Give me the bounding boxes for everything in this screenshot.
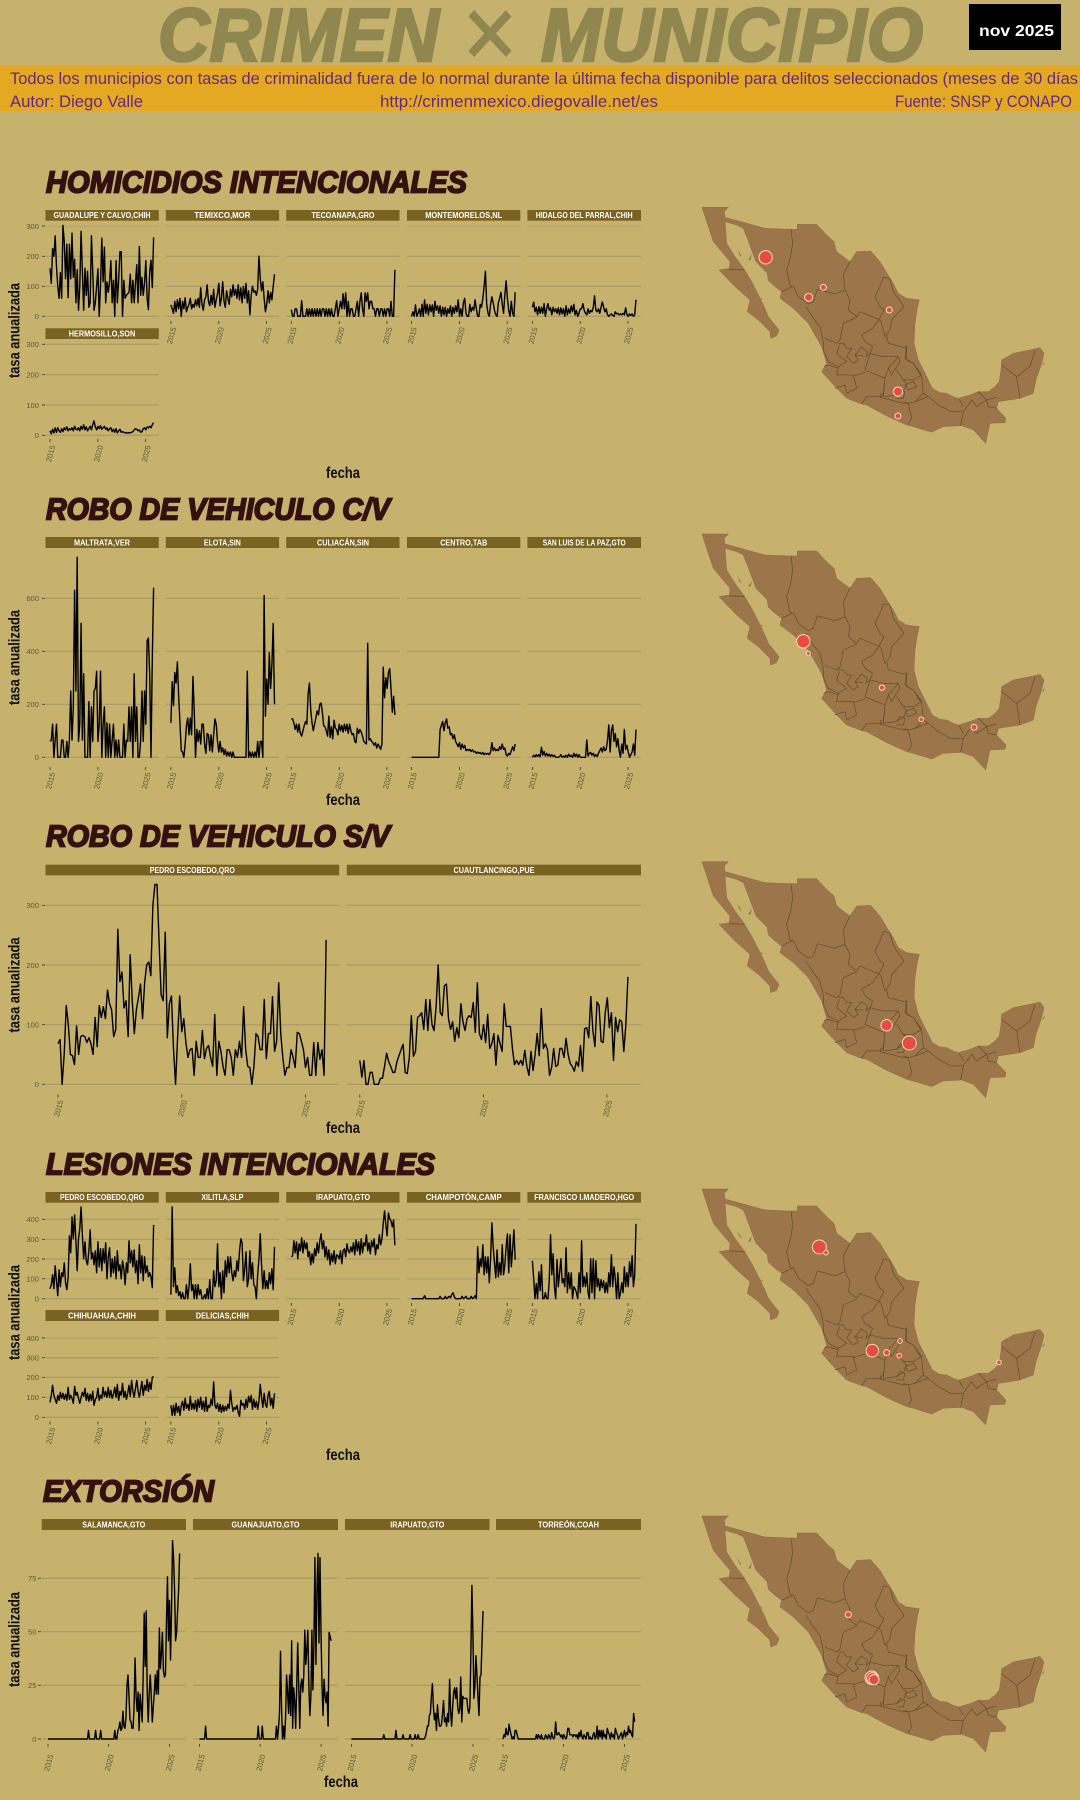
panel: Torreón: 2025 — [619, 1753, 632, 1772]
panel: Irapuato extorsión — [345, 1519, 490, 1772]
panel: Pedro Escobedo: 2025 — [300, 1099, 313, 1118]
panel: Temixco: TEMIXCO,MOR — [194, 211, 251, 220]
panel: Champotón: CHAMPOTÓN,CAMP — [426, 1193, 502, 1202]
panel: Champotón: 2020 — [454, 1308, 467, 1326]
panel: Pedro Escobedo lesiones: 100 — [26, 1274, 39, 1284]
panel: Irapuato extorsión: 2020 — [406, 1753, 419, 1772]
panel: Salamanca: 50 — [28, 1628, 36, 1636]
panel: Maltrata — [26, 537, 159, 790]
panel: Tecoanapa: 2025 — [381, 326, 394, 345]
panel: Pedro Escobedo: 100 — [26, 1020, 39, 1030]
panel: Hermosillo: 300 — [26, 340, 39, 349]
panel: Chihuahua: 2025 — [140, 1426, 153, 1445]
panel: Chihuahua: 300 — [26, 1354, 39, 1362]
date badge: nov 2025 — [979, 23, 1054, 40]
panel: Chihuahua: 400 — [26, 1334, 39, 1343]
y axis title: tasa anualizada — [6, 937, 24, 1032]
date badge — [969, 4, 1061, 50]
heading: lesiones: LESIONES INTENCIONALES — [46, 1148, 436, 1182]
panel: Delicias: 2025 — [261, 1426, 274, 1445]
panel: Delicias: 2020 — [213, 1426, 226, 1445]
panel: Hermosillo: 2015 — [44, 444, 57, 463]
panel: Maltrata: 600 — [26, 594, 39, 603]
panel: Hermosillo — [26, 328, 159, 463]
panel: Pedro Escobedo lesiones: 0 — [35, 1294, 39, 1304]
panel: Francisco I. Madero: 2025 — [622, 1308, 635, 1326]
panel: Chihuahua: 2020 — [92, 1426, 105, 1445]
panel: Hermosillo: 200 — [26, 370, 39, 380]
panel: Hermosillo: 100 — [26, 401, 39, 410]
panel: Pedro Escobedo: 2020 — [176, 1099, 189, 1118]
panel: Tecoanapa — [285, 210, 400, 345]
panel: Pedro Escobedo — [26, 865, 339, 1118]
panel: Delicias: DELICIAS,CHIH — [196, 1311, 249, 1320]
panel: Xilitla: XILITLA,SLP — [201, 1193, 244, 1202]
panel: Maltrata: 2015 — [44, 771, 57, 790]
heading: extorsión: EXTORSIÓN — [43, 1474, 215, 1508]
panel: Maltrata: 2025 — [140, 771, 153, 790]
x axis title: fecha — [326, 1447, 360, 1464]
panel: Montemorelos — [406, 210, 520, 345]
panel: Hermosillo: HERMOSILLO,SON — [69, 329, 135, 338]
y axis title: tasa anualizada — [6, 1592, 24, 1687]
panel: Salamanca: 25 — [28, 1681, 36, 1690]
heading: homicidios: HOMICIDIOS INTENCIONALES — [46, 166, 468, 200]
panel: Pedro Escobedo lesiones: 200 — [26, 1255, 39, 1264]
panel: Montemorelos: 2025 — [501, 326, 514, 345]
map: extorsión — [702, 1516, 1045, 1752]
heading: robo c/v: ROBO DE VEHICULO C/V — [46, 492, 392, 526]
panel: Salamanca: 75 — [28, 1574, 36, 1583]
panel: Chihuahua: 100 — [26, 1393, 39, 1402]
panel: Delicias — [165, 1310, 279, 1445]
panel: Pedro Escobedo: 300 — [26, 901, 39, 910]
panel: Pedro Escobedo: PEDRO ESCOBEDO,QRO — [150, 866, 235, 875]
x axis title: fecha — [326, 465, 360, 482]
panel: Elota — [165, 537, 279, 790]
panel: Irapuato lesiones — [285, 1192, 400, 1326]
panel: Temixco — [165, 210, 279, 345]
panel: Guanajuato: 2020 — [254, 1753, 267, 1772]
panel: Centro — [406, 537, 520, 790]
panel: Chihuahua — [26, 1310, 159, 1445]
subtitle banner — [0, 65, 1080, 111]
panel: Salamanca — [28, 1519, 186, 1772]
panel: Francisco I. Madero: FRANCISCO I.MADERO,HGO — [534, 1193, 634, 1202]
panel: Elota: 2020 — [213, 771, 226, 790]
panel: Hidalgo del Parral — [527, 210, 641, 345]
panel: Hidalgo del Parral: HIDALGO DEL PARRAL,CHIH — [536, 211, 633, 220]
panel: Cuautlancingo — [347, 865, 641, 1118]
panel: Elota: ELOTA,SIN — [204, 538, 241, 547]
panel: San Luis de la Paz: 2025 — [622, 771, 635, 790]
panel: Delicias: 2015 — [165, 1426, 178, 1445]
x axis title: fecha — [324, 1774, 358, 1791]
panel: Cuautlancingo: 2020 — [478, 1099, 491, 1118]
panel: Guanajuato: GUANAJUATO,GTO — [232, 1520, 300, 1529]
panel: Champotón: 2015 — [406, 1308, 419, 1326]
panel: Pedro Escobedo lesiones: 300 — [26, 1235, 39, 1244]
panel: Torreón: TORREÓN,COAH — [538, 1520, 599, 1529]
panel: Montemorelos: 2015 — [406, 326, 419, 345]
panel: Francisco I. Madero — [527, 1192, 641, 1326]
panel: Xilitla — [166, 1192, 279, 1299]
panel: Pedro Escobedo lesiones — [26, 1192, 159, 1304]
panel: Salamanca: 2020 — [103, 1753, 116, 1772]
panel: Chihuahua: 0 — [35, 1413, 39, 1422]
panel: Guanajuato: 2025 — [315, 1753, 328, 1772]
map: robo c/v — [702, 534, 1045, 770]
panel: Cuautlancingo: 2025 — [601, 1099, 614, 1118]
panel: Cuautlancingo: CUAUTLANCINGO,PUE — [454, 866, 535, 875]
panel: Irapuato lesiones: 2015 — [285, 1308, 299, 1326]
panel: Salamanca: 2015 — [42, 1753, 55, 1772]
panel: Culiacán — [285, 537, 400, 790]
panel: San Luis de la Paz: 2015 — [527, 771, 540, 790]
subtitle banner: Autor: Diego Valle — [10, 93, 143, 111]
panel: Pedro Escobedo lesiones: 400 — [26, 1215, 39, 1224]
panel: Maltrata: 2020 — [92, 771, 105, 790]
y axis title: tasa anualizada — [6, 610, 24, 705]
panel: Guadalupe y Calvo: 0 — [35, 312, 39, 321]
panel: Guadalupe y Calvo: 100 — [26, 282, 39, 291]
map: homicidios — [702, 207, 1045, 443]
map: robo s/v — [702, 862, 1045, 1098]
panel: Irapuato lesiones: 2025 — [381, 1308, 394, 1326]
panel: San Luis de la Paz: 2020 — [574, 771, 588, 790]
panel: Hidalgo del Parral: 2015 — [527, 326, 540, 345]
panel: Maltrata: 0 — [35, 753, 39, 762]
panel: Elota: 2025 — [261, 771, 274, 790]
panel: Maltrata: 400 — [26, 647, 39, 656]
panel: Pedro Escobedo: 200 — [26, 961, 39, 970]
panel: Tecoanapa: 2020 — [333, 326, 346, 345]
panel: Maltrata: 200 — [26, 700, 39, 709]
heading: robo s/v: ROBO DE VEHICULO S/V — [46, 820, 392, 854]
panel: Salamanca: 2025 — [164, 1753, 177, 1772]
panel: Montemorelos: 2020 — [454, 326, 467, 345]
map: lesiones — [702, 1189, 1045, 1425]
subtitle banner: Todos los municipios con tasas de criminalidad fuera de lo normal durante la última fecha disponible para delitos seleccionados (meses de 30 días — [10, 70, 1078, 88]
panel: Temixco: 2015 — [165, 326, 178, 345]
panel: Hermosillo: 0 — [35, 431, 39, 440]
panel: Culiacán: 2020 — [333, 771, 346, 790]
panel: Torreón: 2020 — [558, 1753, 571, 1772]
panel: Guadalupe y Calvo: 200 — [26, 252, 39, 261]
panel: Centro: CENTRO,TAB — [440, 538, 487, 547]
panel: Irapuato lesiones: 2020 — [333, 1308, 346, 1326]
panel: Torreón — [496, 1519, 641, 1772]
panel: Temixco: 2025 — [261, 326, 274, 345]
panel: Hidalgo del Parral: 2025 — [622, 326, 635, 345]
panel: Champotón — [406, 1192, 520, 1326]
panel: Irapuato extorsión: 2025 — [467, 1753, 480, 1772]
panel: Tecoanapa: 2015 — [285, 326, 299, 345]
section: robo de vehiculo s/v — [6, 820, 641, 1137]
panel: Pedro Escobedo: 0 — [35, 1080, 39, 1089]
section: extorsión — [6, 1474, 641, 1791]
section: robo de vehiculo c/v — [6, 492, 641, 809]
panel: Montemorelos: MONTEMORELOS,NL — [425, 211, 502, 220]
panel: Torreón: 2015 — [497, 1753, 510, 1772]
panel: Temixco: 2020 — [213, 326, 226, 345]
y axis title: tasa anualizada — [6, 1265, 24, 1360]
panel: Culiacán: 2015 — [285, 771, 299, 790]
panel: Hidalgo del Parral: 2020 — [574, 326, 588, 345]
panel: Guadalupe y Calvo: GUADALUPE Y CALVO,CHIH — [54, 211, 151, 220]
panel: Champotón: 2025 — [501, 1308, 514, 1326]
panel: Tecoanapa: TECOANAPA,GRO — [312, 211, 374, 220]
panel: Centro: 2025 — [501, 771, 514, 790]
panel: Pedro Escobedo lesiones: PEDRO ESCOBEDO,QRO — [60, 1193, 144, 1202]
panel: Culiacán: 2025 — [381, 771, 394, 790]
panel: Chihuahua: CHIHUAHUA,CHIH — [68, 1311, 136, 1320]
y axis title: tasa anualizada — [6, 283, 24, 378]
panel: Hermosillo: 2020 — [92, 444, 105, 463]
panel: Maltrata: MALTRATA,VER — [74, 538, 130, 547]
panel: Irapuato lesiones: IRAPUATO,GTO — [316, 1193, 370, 1202]
panel: Guadalupe y Calvo: 300 — [26, 222, 39, 231]
subtitle banner: http://crimenmexico.diegovalle.net/es — [380, 93, 658, 111]
section: homicidios intencionales — [6, 166, 641, 482]
title — [158, 0, 923, 89]
panel: Guadalupe y Calvo — [26, 210, 159, 321]
panel: Elota: 2015 — [165, 771, 178, 790]
panel: Hermosillo: 2025 — [140, 444, 153, 463]
x axis title: fecha — [326, 792, 360, 809]
panel: Francisco I. Madero: 2020 — [574, 1308, 588, 1326]
panel: Culiacán: CULIACÁN,SIN — [317, 538, 369, 547]
panel: Centro: 2015 — [406, 771, 419, 790]
section: lesiones intencionales — [6, 1148, 641, 1464]
panel: San Luis de la Paz — [527, 537, 641, 790]
panel: Salamanca: 0 — [32, 1735, 36, 1744]
panel: Francisco I. Madero: 2015 — [527, 1308, 540, 1326]
panel: Irapuato extorsión: IRAPUATO,GTO — [390, 1520, 444, 1529]
panel: Chihuahua: 200 — [26, 1373, 39, 1382]
panel: Cuautlancingo: 2015 — [354, 1099, 367, 1118]
panel: San Luis de la Paz: SAN LUIS DE LA PAZ,GTO — [543, 538, 626, 547]
panel: Guanajuato — [193, 1519, 338, 1772]
panel: Chihuahua: 2015 — [44, 1426, 57, 1445]
panel: Guanajuato: 2015 — [194, 1753, 207, 1772]
x axis title: fecha — [326, 1120, 360, 1137]
panel: Salamanca: SALAMANCA,GTO — [82, 1520, 145, 1529]
panel: Pedro Escobedo: 2015 — [52, 1099, 65, 1118]
panel: Centro: 2020 — [454, 771, 467, 790]
panel: Irapuato extorsión: 2015 — [346, 1753, 359, 1772]
